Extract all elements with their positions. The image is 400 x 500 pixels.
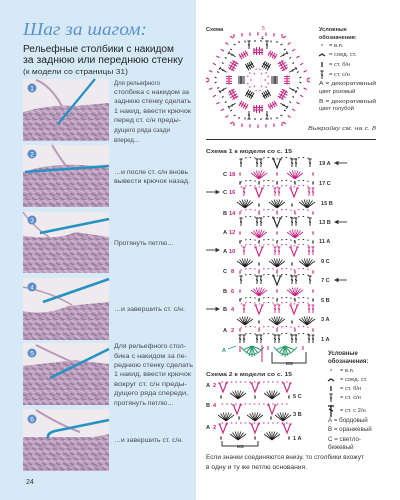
row labels: chart 1 left: A [223, 230, 227, 236]
text: step 3: Протянуть петлю… [114, 241, 174, 247]
legend: chart 2: А = бордовый [328, 417, 368, 424]
row labels: chart 1 left: В [223, 211, 227, 217]
row labels: chart 1 left: C [223, 172, 227, 178]
title: Шаг за шагом: [22, 19, 147, 39]
text: step 5: дущего ряда спереди, [114, 391, 188, 397]
chart 2: MS [237, 444, 244, 449]
legend: chart 2: обозначения: [328, 358, 368, 365]
row labels: chart 1 right: 5 В [321, 298, 330, 304]
legend: chart 2: Условные [328, 351, 359, 357]
text: step 5: вокруг ст. с/н преды- [114, 382, 187, 388]
row labels: chart 1 left: 16 [229, 190, 235, 196]
heading: chart 2: Схема 2 к модели со с. 15 [206, 372, 292, 378]
text: step 1 [114, 81, 191, 144]
photo 1 [23, 79, 109, 141]
row labels: chart 1 left [222, 172, 236, 354]
row labels: chart 1 left: 2 [231, 328, 234, 334]
legend: round chart: Условные [319, 27, 347, 33]
row labels: chart 1 right: 3 A [321, 317, 330, 323]
legend: round chart: цвет розовый [319, 88, 355, 95]
row labels: chart 1 left: 6 [231, 289, 234, 295]
rows 13 to 8 [237, 216, 315, 274]
text: step 5: Для рельефного стол- [114, 344, 186, 350]
text: step 1: Для рельефного [114, 81, 161, 87]
bracket: MS chart 1 [272, 352, 306, 366]
row labels: chart 2: 5 C [293, 394, 302, 400]
row labels: chart 1 right: 19 A [319, 161, 331, 167]
row labels: chart 2: 1 A [293, 436, 302, 442]
photo 4: 4 [30, 284, 34, 292]
text: step 5: реднюю стенку сделать [114, 363, 193, 369]
text: step 1: 1 накид, ввести крючок [114, 109, 191, 115]
row labels: chart 1 right: 11 A [319, 239, 330, 245]
footnote: в одну и ту же петлю основания. [206, 464, 307, 471]
legend: round chart: = соед. ст. [329, 52, 357, 58]
text: step 2: вывести крючок назад. [114, 179, 190, 185]
legend: chart 2: С = светло- [328, 436, 361, 443]
row labels: chart 1 left: A [223, 328, 227, 334]
photo 1: 1 [30, 86, 34, 92]
photo 2 [23, 145, 109, 207]
legend: round chart: = ст. б/н [329, 62, 350, 68]
row labels: chart 1 right: 13 В [319, 220, 331, 226]
legend: round chart: цвет голубой [319, 105, 354, 112]
row labels: chart 1 left: C [223, 190, 227, 196]
chart: round motif: 4 [261, 36, 264, 42]
rows 19 to 14 [237, 158, 315, 215]
heading: round chart: Схема [206, 27, 224, 33]
row labels: chart 2: 4 [213, 403, 217, 409]
row labels: chart 1 left: 8 [231, 269, 234, 275]
base fans [241, 346, 297, 357]
text: step 1: столбика с накидом за [114, 90, 190, 96]
row labels: chart 1 left: A [222, 348, 226, 354]
row labels: chart 1 left: В [223, 289, 227, 295]
row labels: chart 1 right: 9 C [321, 259, 330, 265]
legend: round chart: = в.п. [329, 43, 344, 49]
photo 6 [23, 409, 109, 471]
footnote [206, 453, 364, 471]
photo 3: 3 [30, 218, 34, 224]
text: step 1: вперед… [114, 138, 140, 144]
legend: round chart: = ст. с/н [329, 72, 350, 78]
text: step 2 [114, 170, 190, 185]
row labels: chart 1 right: 1 A [321, 337, 330, 343]
row labels: chart 1 right: 7 C [321, 278, 330, 284]
legend: round chart [319, 27, 376, 112]
photo 5 [23, 343, 109, 405]
row labels: chart 2: 2 [213, 383, 216, 389]
legend: round chart: обозначения: [319, 34, 357, 41]
text: step 1: перед ст. с/н преды- [114, 118, 181, 124]
legend: chart 2: бежевый [328, 444, 354, 451]
row labels: chart 1 right: 17 C [319, 181, 331, 187]
row labels: chart 2: A [206, 425, 210, 431]
rows 7 to 2 [237, 274, 315, 332]
legend: chart 2: = в.п. [340, 368, 355, 374]
legend: chart 2: = ст. с 2/н [340, 408, 366, 414]
heading: (к модели со страницы 31) [23, 67, 129, 76]
legend: round chart: В = декоративный [319, 98, 376, 105]
row labels: chart 1 left: 18 [229, 172, 235, 178]
photo 6: 6 [30, 416, 34, 424]
arrows: chart 1 [206, 162, 347, 349]
text: step 5 [114, 344, 193, 407]
heading: за заднюю или переднюю стенку [23, 55, 183, 66]
heading: Рельефные столбики с накидом [23, 43, 174, 55]
heading [23, 43, 183, 76]
row labels: chart 1 left: 12 [229, 230, 235, 236]
note: pattern reference: Выкройку см. на с. 8 [308, 125, 377, 132]
text: step 2: …и после ст. с/н вновь [114, 170, 188, 176]
legend: chart 2: = ст. с/н [340, 395, 361, 401]
legend: chart 2: = ст. б/н [340, 386, 361, 392]
row labels: chart 1 left: A [223, 249, 227, 255]
legend: chart 2: = соед. ст. [340, 377, 368, 383]
photo 5: 5 [30, 350, 34, 358]
bracket: MS chart 1: MS [286, 361, 293, 366]
panel: step by step background [0, 0, 196, 500]
row labels: chart 1 right [319, 161, 333, 343]
text: step 1: заднюю стенку сделать [114, 99, 191, 105]
row labels: chart 1 right: 15 В [321, 201, 333, 207]
row labels: chart 2: 3 В [293, 412, 302, 418]
row labels: chart 1 left: 4 [231, 307, 235, 313]
legend: round chart: А = декоративный [319, 80, 376, 87]
page number: 24 [26, 479, 34, 486]
row labels: chart 1 left: C [223, 269, 227, 275]
chart: round motif [204, 26, 312, 128]
row labels: chart 1 left: В [223, 307, 227, 313]
row 1 [239, 334, 314, 343]
row labels: chart 2 [206, 383, 302, 442]
text: step 1: дущего ряда сзади [114, 128, 170, 134]
legend: chart 2: В = оранжевый [328, 426, 372, 433]
text: step 4: …и завершить ст. с/н. [114, 307, 185, 313]
row labels: chart 1 left: 14 [229, 211, 236, 217]
text: step 5: 1 накид, ввести крючок [114, 372, 191, 378]
chart: round motif: 5 [262, 26, 265, 32]
row labels: chart 2: В [206, 403, 210, 409]
photo 3 [23, 212, 109, 273]
chart 2 [218, 382, 292, 449]
photo 2: 2 [30, 152, 34, 158]
legend: chart 2 [328, 351, 372, 451]
text: step 5: бика с накидом за пе- [114, 354, 187, 360]
row labels: chart 1 left: 10 [229, 249, 235, 255]
footnote: Если значки соединяются внизу, то столбики вхожут [206, 453, 364, 461]
row labels: chart 2: 2 [213, 425, 216, 431]
text: step 5: протянуть петлю… [114, 401, 174, 407]
heading: chart 1: Схема 1 к модели со с. 15 [206, 149, 292, 155]
photo 4 [23, 278, 109, 340]
chart 1 [237, 158, 315, 362]
text: step 6: …и завершить ст. с/н. [114, 438, 183, 444]
row labels: chart 2: A [206, 383, 210, 389]
